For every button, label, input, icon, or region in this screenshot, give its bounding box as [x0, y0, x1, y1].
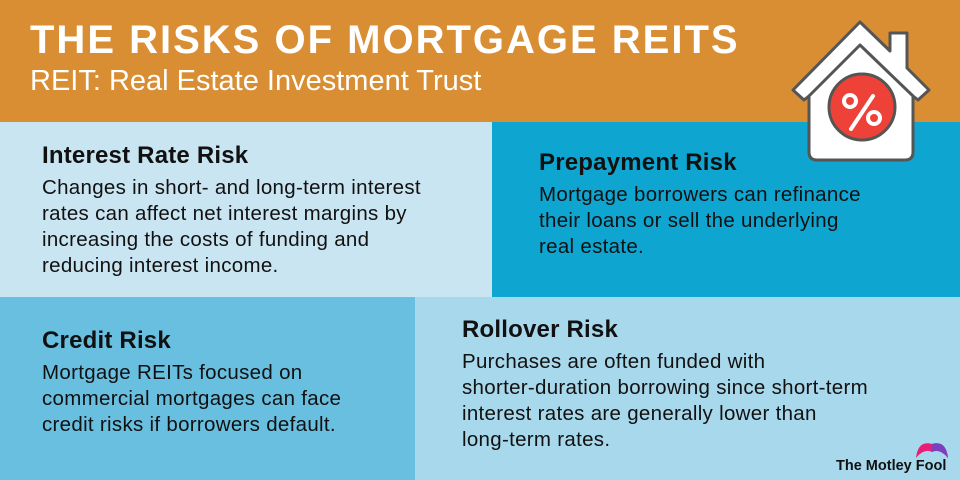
panel: credit risk: [0, 297, 415, 480]
panel: prepayment risk: Mortgage borrowers can refinance: [539, 183, 861, 206]
panel: rollover risk: [415, 297, 960, 480]
panel: prepayment risk: Prepayment Risk: [539, 149, 737, 176]
panel: prepayment risk: real estate.: [539, 235, 644, 258]
panel: rollover risk: long-term rates.: [462, 428, 610, 451]
panel: interest rate risk: rates can affect net interest margins by: [42, 202, 407, 225]
panel: rollover risk: Purchases are often funded with: [462, 350, 765, 373]
panel: interest rate risk: [0, 122, 492, 297]
panel: interest rate risk: Changes in short- and long-term interest: [42, 176, 421, 199]
panel: credit risk: Mortgage REITs focused on: [42, 361, 302, 384]
panel: interest rate risk: Interest Rate Risk: [42, 142, 248, 169]
panel: credit risk: commercial mortgages can face: [42, 387, 341, 410]
panel: prepayment risk: [492, 122, 960, 297]
panel: rollover risk: shorter-duration borrowing since short-term: [462, 376, 868, 399]
panel: interest rate risk: increasing the costs of funding and: [42, 228, 369, 251]
panel: interest rate risk: reducing interest income.: [42, 254, 279, 277]
subtitle: REIT: Real Estate Investment Trust: [30, 65, 481, 97]
panel: rollover risk: interest rates are generally lower than: [462, 402, 817, 425]
logo: The Motley Fool: The Motley Fool: [836, 458, 946, 474]
title: THE RISKS OF MORTGAGE REITS: [30, 18, 740, 62]
panel: rollover risk: Rollover Risk: [462, 316, 618, 343]
panel: prepayment risk: their loans or sell the underlying: [539, 209, 839, 232]
icon: house with percent: [791, 20, 930, 162]
panel: credit risk: Credit Risk: [42, 327, 171, 354]
panel: credit risk: credit risks if borrowers default.: [42, 413, 336, 436]
header band: [0, 0, 960, 122]
logo: The Motley Fool: [836, 443, 948, 474]
